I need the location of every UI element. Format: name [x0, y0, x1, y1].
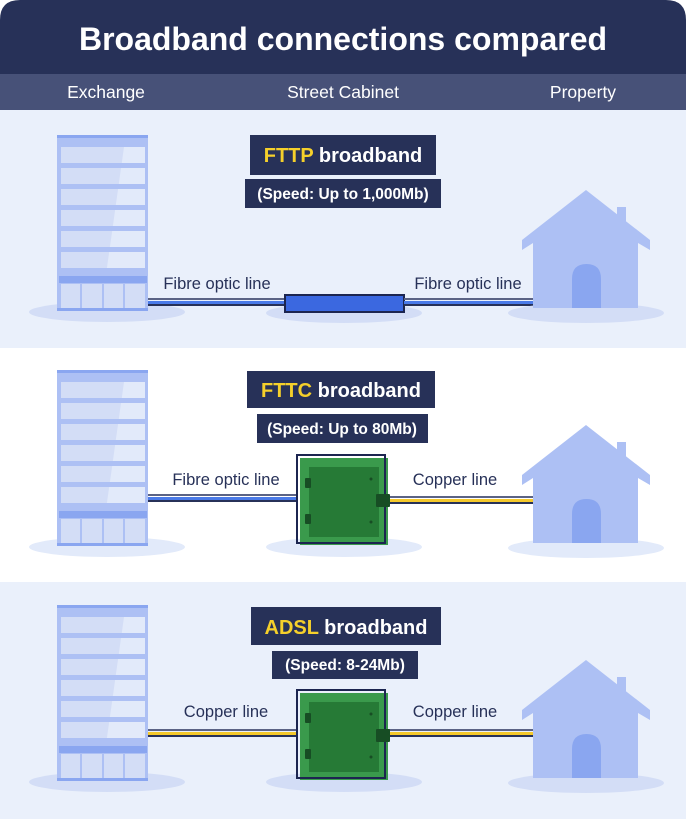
icon: street cabinet	[266, 455, 422, 557]
ADSL title: ADSL broadband	[265, 617, 427, 639]
icon: house	[508, 190, 664, 323]
ADSL speed	[272, 651, 418, 679]
panel: ADSL	[29, 605, 664, 793]
fibre line right	[404, 275, 534, 306]
panel: FTTP	[29, 135, 664, 323]
FTTP title: FTTP broadband	[264, 145, 422, 167]
icon: house	[508, 425, 664, 558]
column headings bar: Exchange	[67, 82, 145, 102]
copper line left	[148, 703, 298, 737]
fibre line right: Fibre optic line	[414, 275, 522, 293]
panel: FTTC	[29, 370, 664, 558]
fibre line	[148, 471, 298, 502]
FTTP speed: (Speed: Up to 1,000Mb)	[257, 186, 429, 203]
icon: exchange building	[29, 370, 185, 557]
copper line left: Copper line	[184, 703, 268, 721]
header: title	[0, 0, 686, 74]
icon: exchange building	[29, 605, 185, 792]
FTTC speed: (Speed: Up to 80Mb)	[267, 421, 417, 438]
icon: house	[508, 660, 664, 793]
ADSL title	[251, 607, 441, 645]
FTTC speed	[257, 414, 428, 443]
fibre line: Fibre optic line	[172, 471, 280, 489]
FTTC title: FTTC broadband	[261, 380, 421, 402]
copper line: Copper line	[413, 471, 497, 489]
copper line right	[387, 703, 534, 737]
fibre line left	[148, 275, 285, 306]
header: title: Broadband connections compared	[79, 21, 607, 57]
FTTP speed	[245, 179, 441, 208]
copper line	[387, 471, 534, 504]
FTTP title	[250, 135, 436, 175]
cabinet shadow + fibre joint	[266, 295, 422, 323]
fibre line left: Fibre optic line	[163, 275, 271, 293]
ADSL speed: (Speed: 8-24Mb)	[285, 657, 405, 674]
icon: exchange building	[29, 135, 185, 322]
column headings bar	[0, 74, 686, 110]
icon: street cabinet	[266, 690, 422, 792]
FTTC title	[247, 371, 435, 408]
column headings bar: Property	[550, 82, 616, 102]
column headings bar: Street Cabinet	[287, 82, 399, 102]
copper line right: Copper line	[413, 703, 497, 721]
